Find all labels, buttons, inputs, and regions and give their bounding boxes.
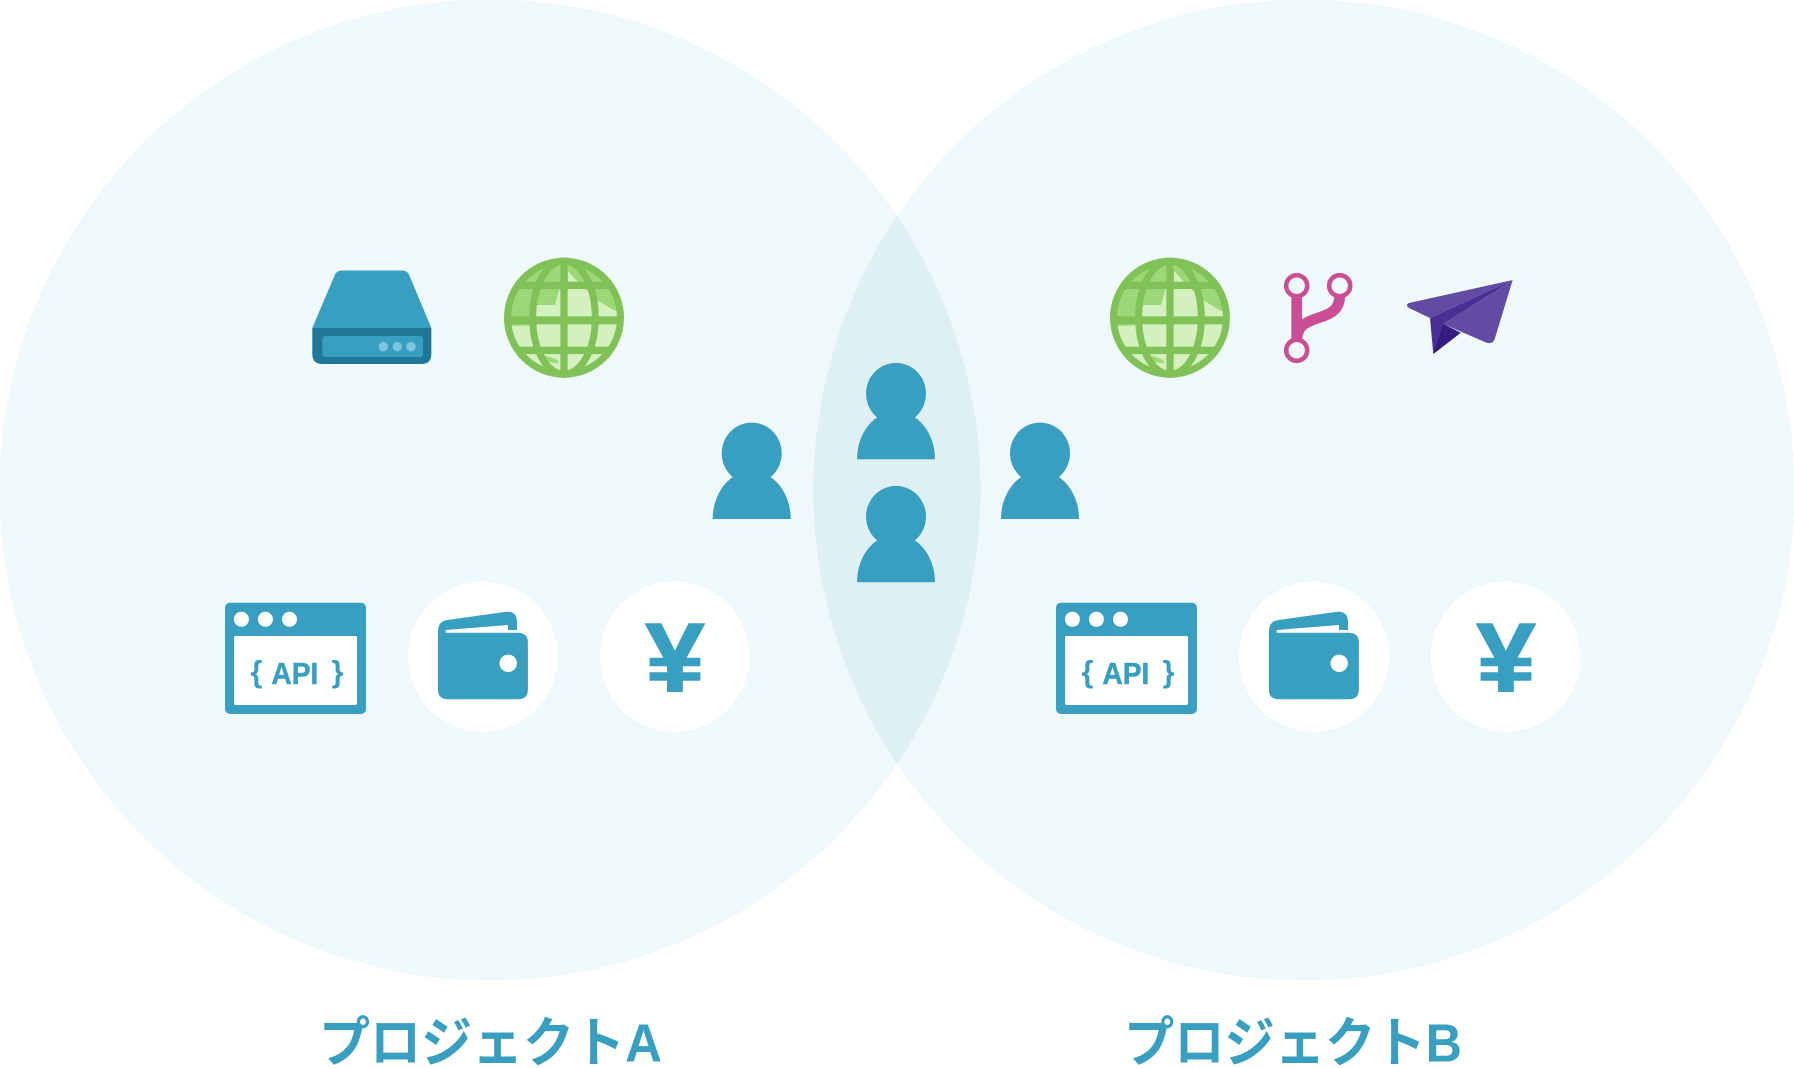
icon: yen B [1431, 582, 1581, 732]
icon: wallet B [1239, 582, 1389, 732]
circle: project B [814, 0, 1794, 980]
icon group: project B API, wallet, yen [1056, 582, 1581, 732]
icon: yen A: ¥ [646, 603, 705, 712]
icon: storage drive [312, 270, 431, 364]
overlap lens between projects [813, 216, 981, 764]
icon: API window B: API [1102, 656, 1149, 691]
icon: API window B [1056, 603, 1197, 714]
icon: API window A: { [250, 654, 262, 689]
icon: person right [1001, 423, 1079, 519]
circle: project A [0, 0, 980, 980]
icon: API window A: API [271, 656, 318, 691]
icon: API window B: } [1162, 654, 1175, 689]
icon: globe project B [1109, 257, 1233, 380]
icon: API window A: } [331, 654, 344, 689]
icon: globe project A [503, 257, 627, 380]
icon: API window A [225, 603, 366, 714]
icon: yen B: ¥ [1476, 603, 1536, 712]
icon: person left [713, 423, 791, 519]
icon: yen A [600, 582, 750, 732]
icon: person centre top [857, 363, 935, 459]
icon: wallet A [408, 582, 558, 732]
icon: API window B: { [1081, 654, 1093, 689]
icon: paper plane [1407, 280, 1513, 354]
icon: git branch [1286, 275, 1350, 361]
icon: person centre bottom [857, 486, 935, 582]
icon group: project A API, wallet, yen [225, 582, 750, 732]
